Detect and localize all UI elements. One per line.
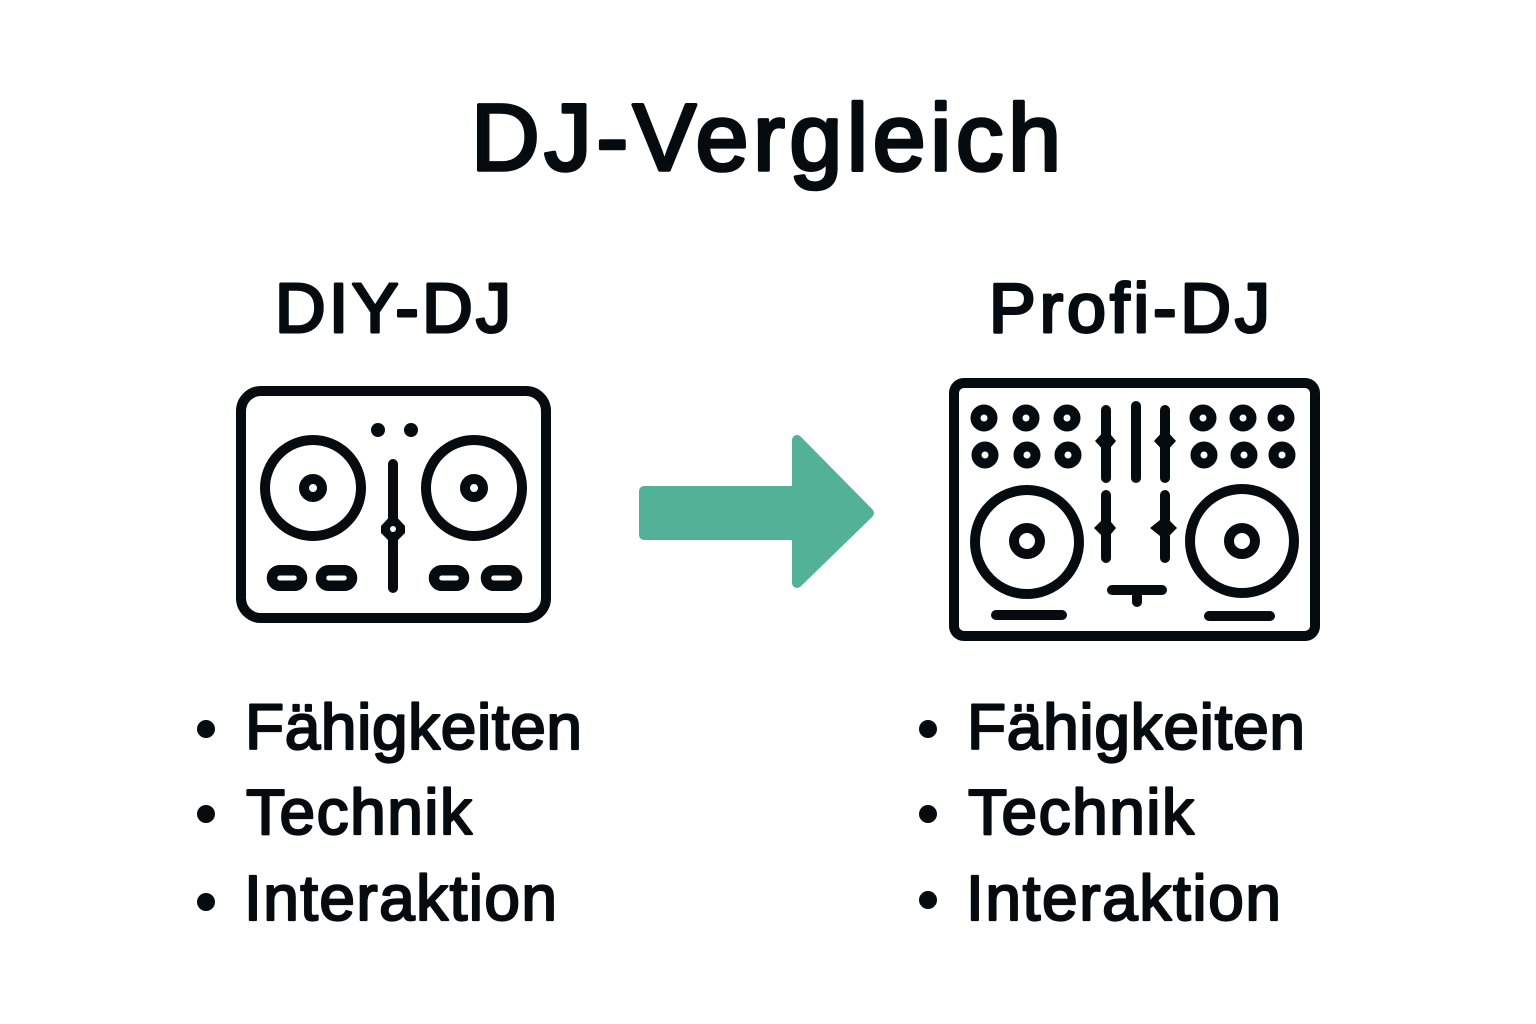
list: Profi-DJ bbox=[919, 691, 1305, 934]
heading: Profi-DJ: Profi-DJ bbox=[989, 269, 1270, 347]
icon: professional DJ controller bbox=[954, 383, 1315, 636]
list: DIY-DJ: Interaktion bbox=[244, 862, 557, 934]
list: DIY-DJ: Fähigkeiten bbox=[245, 691, 582, 763]
list: DIY-DJ: Technik bbox=[246, 776, 473, 848]
arrow bbox=[644, 440, 869, 583]
list: Profi-DJ: Fähigkeiten bbox=[967, 691, 1305, 763]
heading: DIY-DJ: DIY-DJ bbox=[275, 269, 511, 347]
list: Profi-DJ: Technik bbox=[968, 776, 1195, 848]
icon: DIY DJ controller bbox=[241, 391, 546, 618]
list: Profi-DJ: Interaktion bbox=[966, 862, 1281, 934]
title: DJ-Vergleich bbox=[471, 85, 1061, 191]
list: DIY-DJ bbox=[197, 691, 582, 934]
